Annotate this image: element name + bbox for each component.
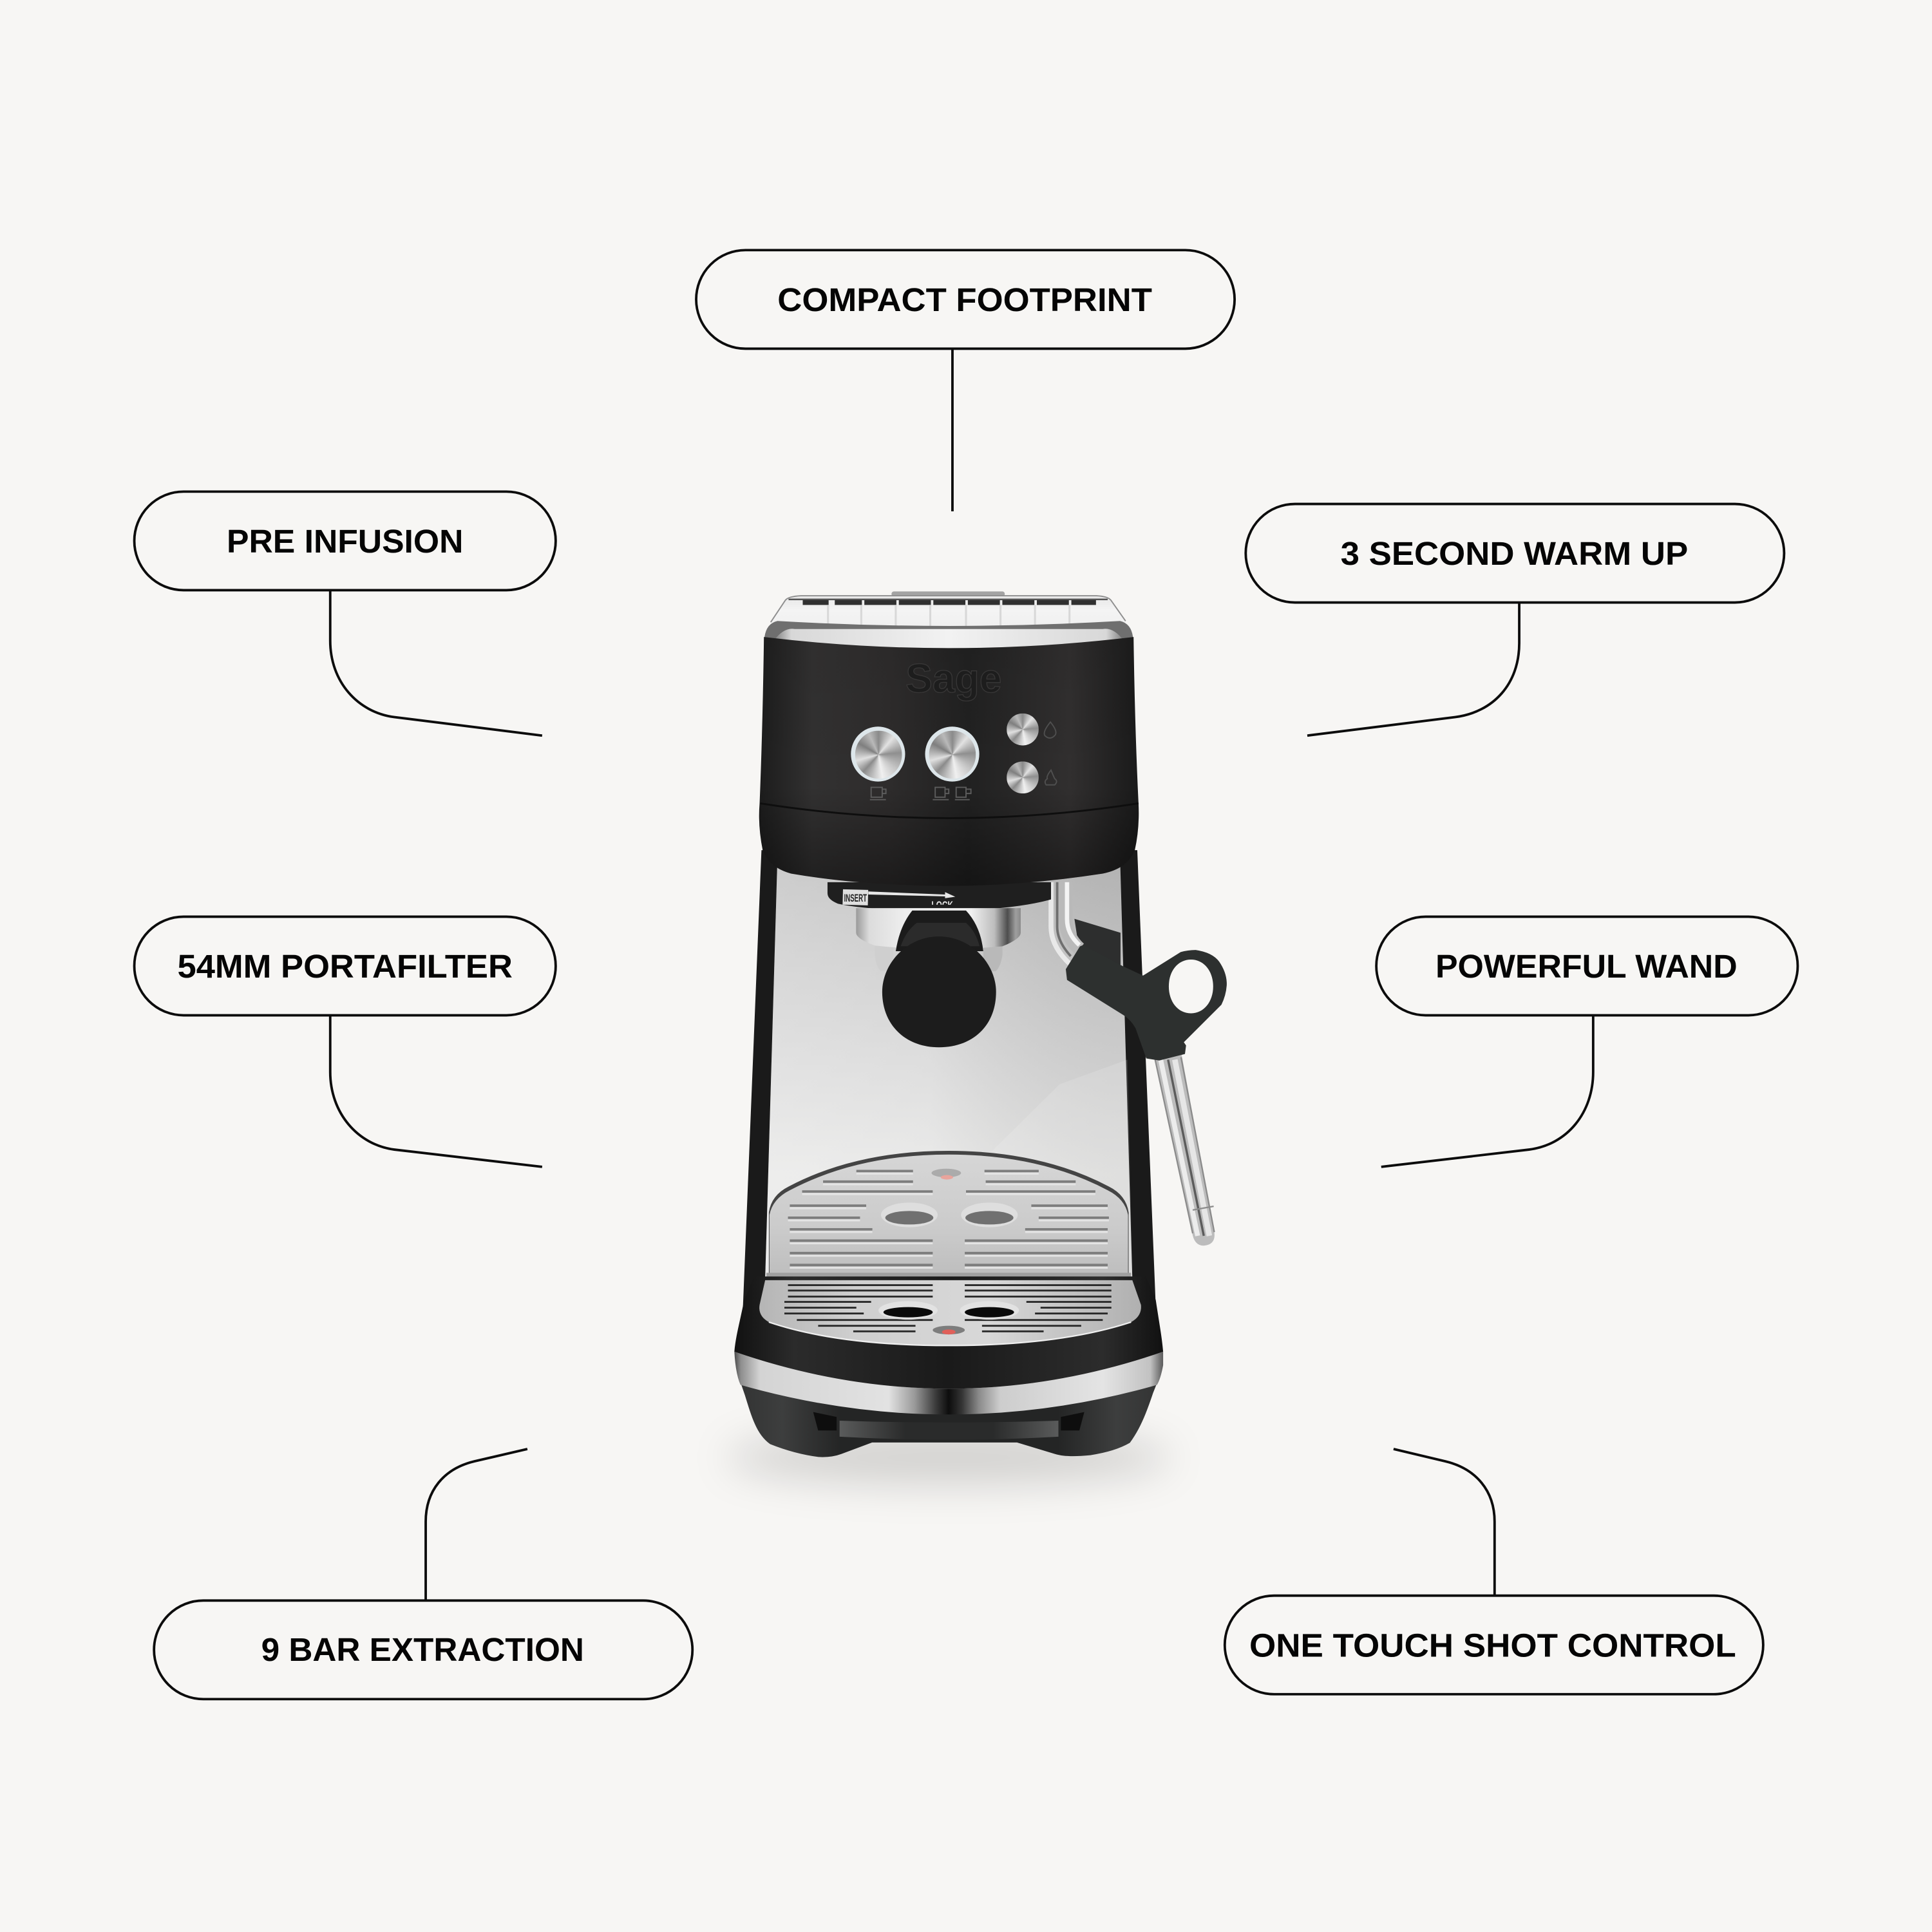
connector line xyxy=(426,1449,527,1600)
pill outline xyxy=(135,916,556,1016)
steam wand xyxy=(1155,1055,1215,1245)
chrome band xyxy=(734,1352,1163,1414)
label text: 54MM PORTAFILTER xyxy=(178,948,513,985)
steam pipe xyxy=(1051,882,1079,963)
connector line xyxy=(952,348,953,511)
neck highlight xyxy=(901,923,980,946)
steam icon xyxy=(1045,770,1057,785)
seam line xyxy=(760,803,1139,818)
double cup icons xyxy=(933,788,971,800)
front float indicator xyxy=(933,1326,965,1334)
base centre panel and notches xyxy=(813,1412,1084,1440)
connector line xyxy=(330,1016,542,1167)
steam handle and ring xyxy=(1066,945,1227,1061)
water drop icon xyxy=(1045,722,1056,738)
callout: 9 bar extraction xyxy=(154,1449,692,1699)
grate slot highlights xyxy=(788,1174,1109,1268)
tank cap xyxy=(891,591,1005,596)
callout: compact footprint xyxy=(696,250,1235,511)
callout: pre infusion xyxy=(135,491,556,735)
insert tag xyxy=(842,889,868,905)
group head collar xyxy=(828,882,1051,911)
scalloped inner edge xyxy=(788,599,1108,600)
single cup icon xyxy=(870,788,886,800)
bracket behind steam arm xyxy=(1074,919,1121,967)
insert tag: INSERT xyxy=(844,893,867,904)
coffee machine xyxy=(727,591,1227,1484)
hot water button xyxy=(1007,713,1039,745)
rear drip grate xyxy=(766,1151,1131,1278)
label text: 3 SECOND WARM UP xyxy=(1341,535,1688,572)
connector line xyxy=(330,590,542,735)
label text: PRE INFUSION xyxy=(227,523,463,560)
handle grip xyxy=(882,936,996,1047)
grate slot shadows xyxy=(788,1171,1109,1265)
portafilter xyxy=(856,908,1021,1047)
plate drain holes xyxy=(878,1301,938,1320)
label text: COMPACT FOOTPRINT xyxy=(777,281,1152,318)
callout: powerful wand xyxy=(1376,916,1797,1167)
spouts xyxy=(875,943,893,971)
label text: ONE TOUCH SHOT CONTROL xyxy=(1249,1627,1736,1663)
black base body xyxy=(734,1276,1163,1388)
tank ribs xyxy=(828,605,1070,626)
connector line xyxy=(1394,1449,1495,1596)
lock arrow xyxy=(868,891,955,898)
lower base xyxy=(741,1380,1158,1457)
callout: one touch shot control xyxy=(1225,1449,1763,1694)
label text: POWERFUL WAND xyxy=(1435,948,1738,985)
single shot dial xyxy=(851,726,905,782)
pill outline xyxy=(1245,504,1784,603)
double shot dial xyxy=(925,726,980,782)
embossed logo: Sage xyxy=(905,656,1001,701)
pill outline xyxy=(135,491,556,590)
callout: 54mm portafilter xyxy=(135,916,556,1167)
pill outline xyxy=(1376,916,1797,1016)
machine head xyxy=(759,637,1139,886)
handle neck xyxy=(896,911,983,951)
connector line xyxy=(1307,603,1519,735)
connector line xyxy=(1381,1016,1593,1167)
basket xyxy=(856,908,1021,949)
front lip xyxy=(764,621,1133,645)
pill outline xyxy=(696,250,1235,348)
side posts xyxy=(743,850,1156,1306)
front drip plate xyxy=(759,1280,1141,1345)
lock text: LOCK xyxy=(931,900,953,911)
callout: 3 second warm up xyxy=(1245,504,1784,735)
rear drain holes xyxy=(881,1202,938,1227)
pill outline xyxy=(154,1600,692,1699)
label text: 9 BAR EXTRACTION xyxy=(261,1631,584,1668)
shadow under machine xyxy=(727,1430,1171,1484)
stainless back panel xyxy=(765,857,1132,1279)
glass tank xyxy=(771,596,1126,632)
rear float indicator xyxy=(931,1169,961,1177)
plate slots xyxy=(784,1285,1112,1331)
lid and water tank xyxy=(764,591,1133,649)
steam button xyxy=(1007,761,1039,793)
pill outline xyxy=(1225,1596,1763,1694)
